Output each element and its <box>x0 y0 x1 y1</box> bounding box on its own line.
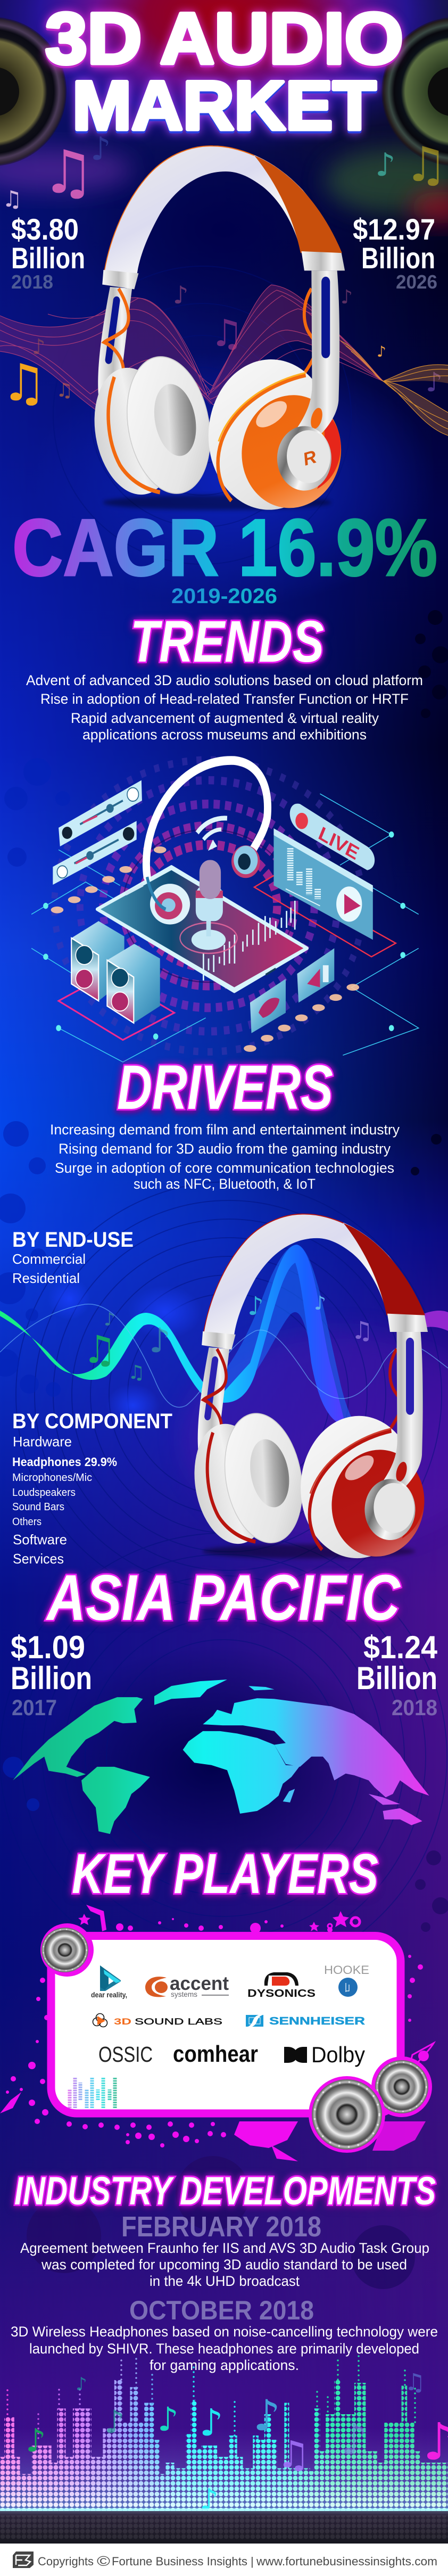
speaker ring: top left <box>40 1923 94 1977</box>
development: february 2018: was completed for upcoming 3D audio standard to be used <box>41 2257 407 2273</box>
development: february 2018: in the 4k UHD broadcast <box>150 2273 300 2289</box>
live pill <box>290 804 375 870</box>
sound wave ribbon <box>0 1245 448 1432</box>
logo: dear reality: dear reality, <box>91 1990 127 1999</box>
heading: trends: TRENDS <box>130 609 324 674</box>
headphones: red <box>184 1214 437 1574</box>
trends list: Rapid advancement of augmented & virtual reality <box>71 710 379 726</box>
title: 3D AUDIO <box>45 0 403 79</box>
CAGR years: 2019-2026 <box>171 585 277 608</box>
music notes around ribbon: ♫ <box>128 1362 145 1384</box>
copyright text: Fortune Business Insights <box>112 2555 247 2568</box>
music notes: top decoration: ♪ <box>173 281 188 309</box>
speaker ring: bottom centre <box>309 2076 385 2153</box>
music notes: top decoration: ♪ <box>32 335 46 359</box>
trends list <box>26 672 423 743</box>
stat: asia pacific 2017: $1.09 <box>11 1629 85 1665</box>
development: october 2018 <box>11 2295 438 2373</box>
stat: asia pacific 2018: $1.24 <box>363 1629 438 1665</box>
music notes around ribbon: ♫ <box>82 1327 117 1372</box>
copyright text: www.fortunebusinessinsights.com <box>256 2555 437 2568</box>
media window <box>273 828 373 940</box>
segment: by component: Hardware <box>13 1434 72 1450</box>
phone <box>97 867 307 991</box>
music notes around ribbon <box>82 1291 373 1384</box>
logo: ossic: OSSIC <box>98 2042 153 2067</box>
music notes around ribbon: ♪ <box>314 1293 326 1314</box>
title <box>45 0 403 144</box>
title: MARKET <box>72 67 376 144</box>
equalizer floor <box>0 2508 448 2544</box>
copyright text <box>38 2553 437 2569</box>
icon: orange music note: ♫ <box>1 353 47 413</box>
segment: by component: Loudspeakers <box>12 1487 76 1499</box>
stat: 2018 market value: 2018 <box>11 271 53 293</box>
audio waveform <box>203 901 295 981</box>
logo: hooke <box>324 1963 369 1997</box>
logo: dolby: Dolby <box>311 2042 365 2067</box>
music notes around ribbon: ♪ <box>247 1291 264 1321</box>
panel: key players frame <box>51 1936 401 2113</box>
music notes: top decoration: ♪ <box>375 146 395 184</box>
copyright text: © <box>97 2553 110 2569</box>
music notes in equalizer: ♫ <box>404 2369 425 2396</box>
music notes in equalizer: ♪ <box>200 2401 223 2445</box>
equalizer dots <box>0 2356 448 2517</box>
magenta splatter around frame <box>0 1905 426 2161</box>
stat: asia pacific 2018: 2018 <box>392 1695 437 1720</box>
music notes in equalizer: ♪ <box>26 2422 46 2459</box>
drivers list: such as NFC, Bluetooth, & IoT <box>134 1176 316 1192</box>
music notes around ribbon: ♫ <box>351 1316 373 1345</box>
mic base <box>180 923 237 953</box>
icon: equalizer <box>70 2077 115 2108</box>
logo: comhear: comhear <box>173 2041 258 2067</box>
logo: sennheiser: SENNHEISER <box>269 2015 366 2027</box>
development: october 2018: 3D Wireless Headphones based on noise-cancelling technology were <box>11 2324 438 2340</box>
drivers list <box>50 1122 400 1192</box>
trends list: applications across museums and exhibitions <box>82 727 367 743</box>
music notes: top decoration: ♫ <box>2 186 22 212</box>
illustration: isometric 3D audio phone: LIVE <box>316 822 362 864</box>
speakers <box>71 921 160 1023</box>
glow nodes <box>51 846 359 1052</box>
trends list: Advent of advanced 3D audio solutions based on cloud platform <box>26 672 423 688</box>
logo: sennheiser <box>246 2015 366 2027</box>
segment: by component: Others <box>12 1516 42 1528</box>
music notes in equalizer <box>26 2369 448 2517</box>
footer <box>0 2544 448 2576</box>
music notes: top decoration: ♫ <box>210 311 244 355</box>
logo: dysonics: DYSONICS <box>247 1988 316 1999</box>
music notes in equalizer: ♪ <box>253 2391 280 2440</box>
slider panels <box>53 780 142 885</box>
like and sound icons <box>250 948 334 1033</box>
music notes around ribbon: ♪ <box>104 1309 115 1330</box>
music notes in equalizer: ♫ <box>277 2433 310 2476</box>
stat: asia pacific 2018 <box>356 1629 438 1720</box>
logo: accent systems <box>145 1972 229 1998</box>
music notes in equalizer: ♪ <box>341 2415 368 2464</box>
stat: 2026 market value: $12.97 <box>353 212 435 246</box>
segment: by end-use: Commercial <box>12 1251 86 1267</box>
headset <box>146 760 268 877</box>
segment: by end-use: BY END-USE <box>12 1228 134 1252</box>
music notes: top decoration <box>2 130 447 401</box>
sound wave lines <box>0 285 448 435</box>
development: october 2018: for gaming applications. <box>150 2357 299 2373</box>
stat: asia pacific 2017: 2017 <box>12 1695 57 1720</box>
music notes: top decoration: ♪ <box>426 367 443 398</box>
logo: accent systems: systems <box>171 1990 197 1998</box>
music notes in equalizer: ♪ <box>76 2374 87 2395</box>
trends list: Rise in adoption of Head-related Transfer Function or HRTF <box>40 691 409 707</box>
drivers list: Rising demand for 3D audio from the gaming industry <box>59 1141 391 1157</box>
segment: by end-use: Residential <box>12 1270 80 1286</box>
logo: dysonics <box>247 1972 316 1999</box>
speaker ring: bottom right <box>371 2056 432 2117</box>
segment: by component: Software <box>13 1532 67 1548</box>
music notes: top decoration: ♪ <box>377 343 386 360</box>
speaker: top left <box>0 17 67 166</box>
heading: drivers: DRIVERS <box>117 1052 333 1123</box>
segment: by component <box>12 1410 172 1567</box>
logo: hooke: HOOKE <box>324 1963 369 1977</box>
copyright text: Copyrights <box>38 2555 94 2568</box>
microphone <box>206 912 211 936</box>
music notes in equalizer: ♪ <box>200 2483 219 2517</box>
stat: 2018 market value <box>11 212 85 293</box>
segment: by component: Microphones/Mic <box>12 1472 92 1484</box>
speaker: top right <box>381 17 448 166</box>
icon: fortune business insights logo <box>13 2552 34 2568</box>
headphone logo letter: R <box>301 447 319 470</box>
music notes: top decoration: ♫ <box>404 137 447 193</box>
segment: by component: Headphones 29.9% <box>12 1455 117 1469</box>
music notes: top decoration: ♪ <box>90 130 111 168</box>
world map <box>13 1680 429 1834</box>
stat: 2018 market value: Billion <box>11 241 85 275</box>
illustration: isometric 3D audio phone <box>31 760 419 1062</box>
logo: 3D sound labs: 3D <box>114 2017 131 2027</box>
drivers list: Increasing demand from film and entertainment industry <box>50 1122 400 1138</box>
logo: 3D sound labs: SOUND LABS <box>135 2017 222 2027</box>
copyright text: | <box>251 2555 254 2568</box>
music notes in equalizer: ♪ <box>157 2400 179 2439</box>
development: february 2018: Agreement between Fraunho fer IIS and AVS 3D Audio Task Group <box>20 2240 429 2256</box>
segment: by component: Services <box>13 1551 64 1567</box>
circuit lines <box>31 794 419 1062</box>
wifi <box>197 818 227 851</box>
development: february 2018 <box>20 2211 429 2289</box>
logo: 3D sound labs <box>93 2013 222 2027</box>
music notes: top decoration: ♪ <box>341 286 353 308</box>
stat: asia pacific 2017: Billion <box>11 1660 92 1696</box>
headphones: orange <box>83 146 354 526</box>
logo: dear reality <box>91 1965 127 1999</box>
stat: 2018 market value: $3.80 <box>11 212 79 246</box>
development: october 2018: launched by SHIVR. These headphones are primarily developed <box>29 2341 419 2357</box>
stat: asia pacific 2017 <box>11 1629 92 1720</box>
mosaic rings <box>54 760 363 1052</box>
logo: dolby <box>284 2042 365 2067</box>
music notes: top decoration: ♫ <box>42 138 95 207</box>
segment: by end-use <box>12 1228 134 1286</box>
stat: 2026 market value: 2026 <box>396 271 437 293</box>
music notes around ribbon: ♪ <box>149 1321 171 1361</box>
logo: accent systems: accent <box>170 1972 229 1994</box>
segment: by component: Sound Bars <box>12 1501 64 1513</box>
stat: 2026 market value <box>353 212 437 293</box>
development: february 2018: FEBRUARY 2018 <box>121 2211 321 2243</box>
drivers list: Surge in adoption of core communication technologies <box>55 1160 394 1176</box>
music notes in equalizer: ♪ <box>104 2404 125 2441</box>
music notes: top decoration: ♫ <box>56 380 73 401</box>
segment: by component: BY COMPONENT <box>12 1410 172 1433</box>
development: october 2018: OCTOBER 2018 <box>129 2295 314 2325</box>
